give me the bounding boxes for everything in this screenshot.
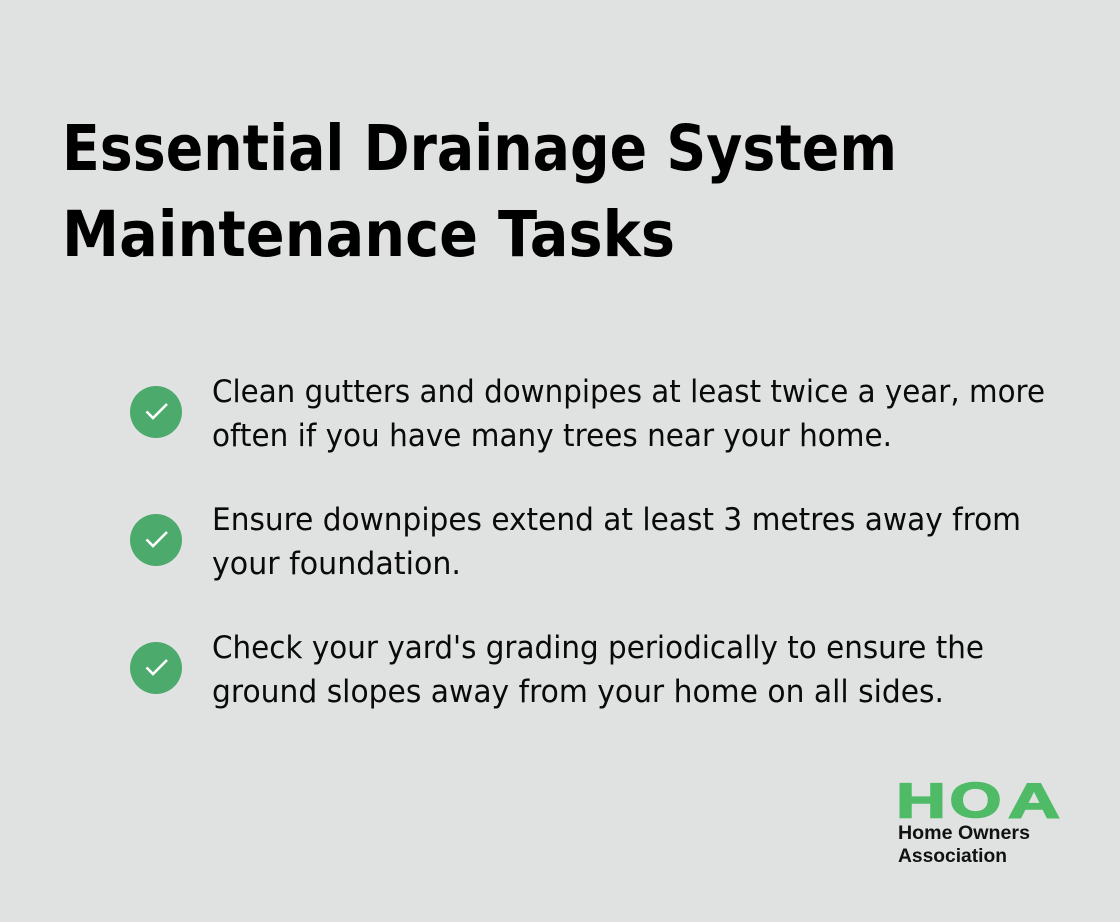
logo: HOA Home Owners Association: Association <box>898 846 1007 867</box>
item 3 <box>130 630 984 710</box>
title: Maintenance Tasks <box>62 198 675 271</box>
text: downpipes <box>212 502 1021 582</box>
text: grading: ground slopes away from your home on all sides. <box>212 674 944 710</box>
item 2 <box>130 502 1021 582</box>
text: grading <box>212 630 984 710</box>
text: downpipes: Ensure downpipes extend at least 3 metres away from <box>212 502 1021 538</box>
text: clean gutters <box>212 374 1045 454</box>
icon: check circle 3 <box>130 642 182 694</box>
text: clean gutters: often if you have many trees near your home. <box>212 418 892 454</box>
title <box>62 112 897 271</box>
logo: HOA Home Owners Association: O <box>950 774 1002 828</box>
icon: check circle 2 <box>130 514 182 566</box>
icon: check circle 1 <box>130 386 182 438</box>
logo: HOA Home Owners Association: Home Owners <box>898 823 1030 844</box>
logo: HOA Home Owners Association <box>896 774 1060 867</box>
text: grading: Check your yard's grading periodically to ensure the <box>212 630 984 666</box>
logo: HOA Home Owners Association: H <box>896 774 946 828</box>
item 1 <box>130 374 1045 454</box>
text: clean gutters: Clean gutters and downpipes at least twice a year, more <box>212 374 1045 410</box>
text: downpipes: your foundation. <box>212 546 461 582</box>
title: Essential Drainage System <box>62 112 897 185</box>
logo: HOA Home Owners Association: A <box>1008 774 1060 828</box>
checklist <box>130 374 1045 710</box>
